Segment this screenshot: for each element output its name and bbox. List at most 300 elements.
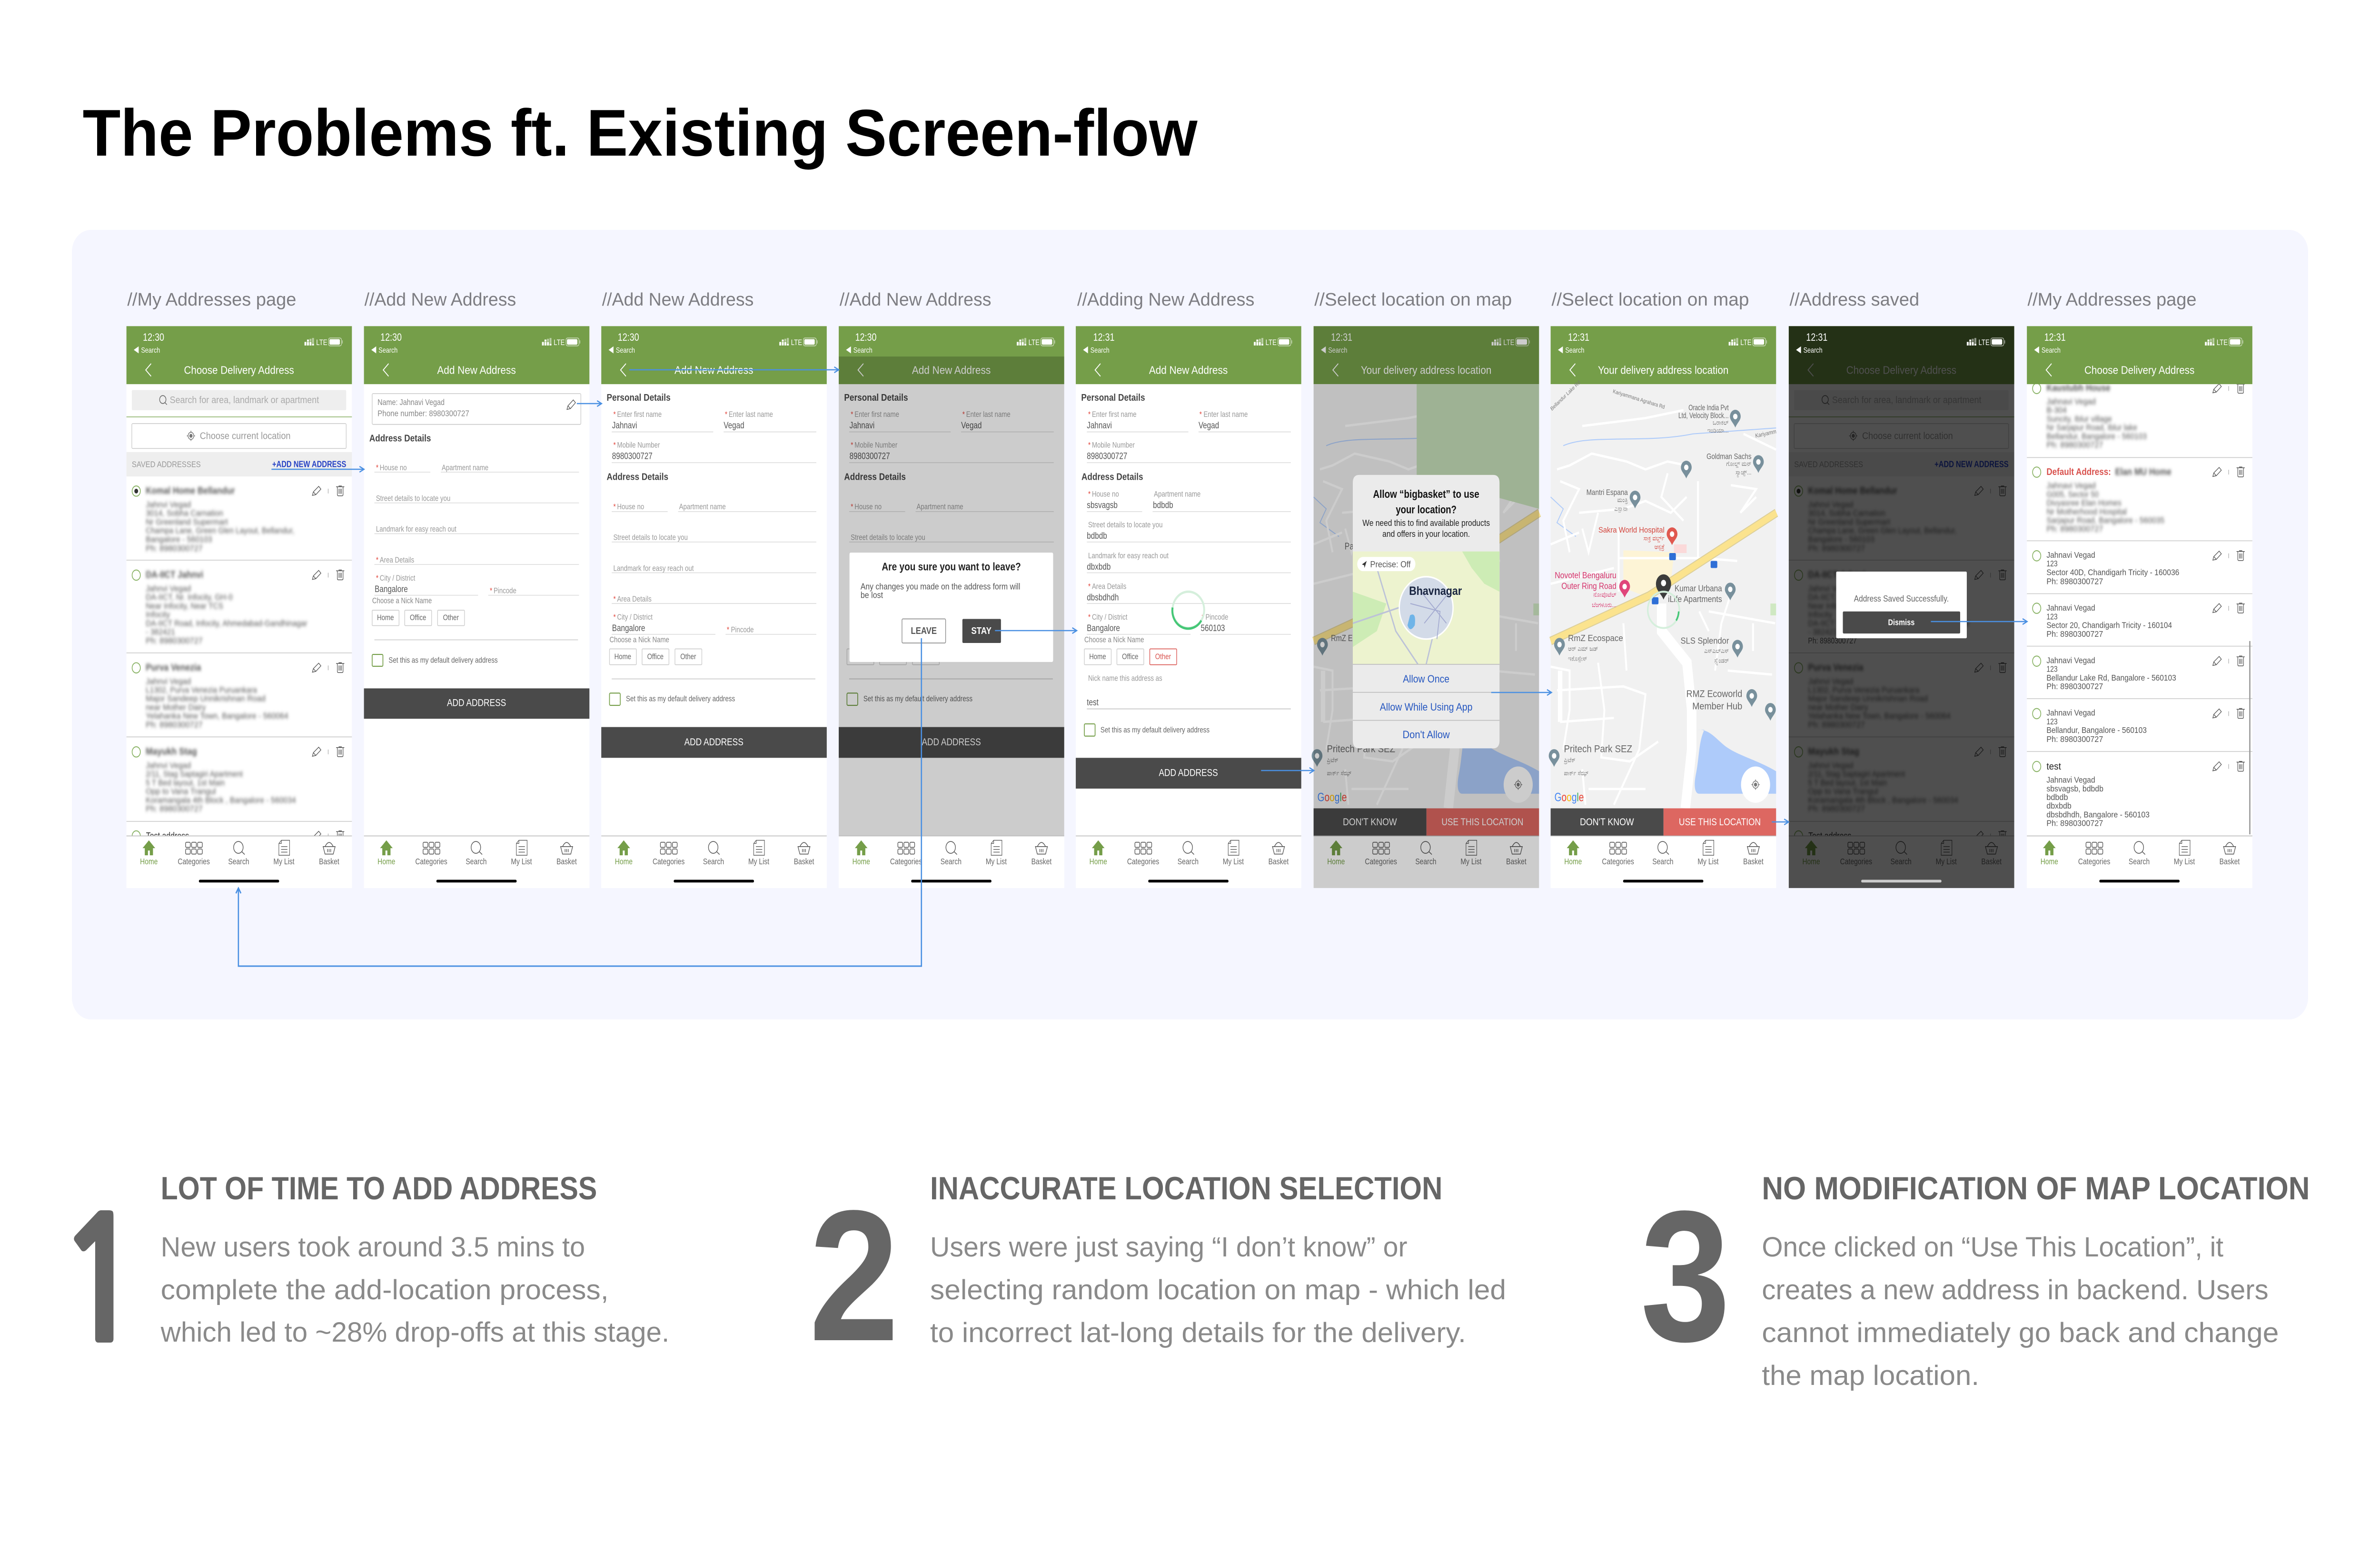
screen 5: adding new address filled form: Jahnavi (1087, 420, 1112, 430)
screen 8: address saved dialog: Basket (1981, 858, 2002, 867)
screen 7: select location on map: LTE (1740, 338, 1752, 347)
screen 6: location permission dialog over map: Categories (1365, 858, 1397, 867)
screen 4: leave confirmation dialog: Enter first name (854, 410, 899, 419)
screen 1: my addresses page: 12:30 (143, 332, 164, 343)
screen 7: select location on map: ಪಾರ್ಕ್ ಸೆಝ್ (1564, 769, 1589, 777)
screen 2: add new address: Add New Address (437, 365, 516, 376)
screen 2: add new address: * (376, 464, 378, 472)
screen 8: address saved dialog: 5 T Bed layout, 1st Main (1808, 779, 1887, 788)
screen 6: location permission dialog over map: LTE (1503, 338, 1515, 347)
screen 5: adding new address filled form: Categories (1127, 858, 1159, 867)
screen 6: location permission dialog over map: Home (1327, 858, 1345, 867)
screen 8: address saved dialog: L1302, Purva Venezia Puruankara (1808, 686, 1919, 695)
screen 5: adding new address filled form: * (1088, 613, 1091, 622)
screen 8: address saved dialog: Choose Delivery Address (1846, 365, 1956, 376)
screen 5: adding new address filled form: bdbdb (1153, 500, 1173, 510)
screen 4: leave confirmation dialog: * (851, 503, 853, 511)
screen 2: add new address: City / District (380, 574, 416, 583)
flow arrows connecting screens (236, 367, 2027, 966)
screen 9: my addresses page with new address (2027, 326, 2252, 888)
screen 9: my addresses page with new address: bdbdb (2046, 793, 2068, 802)
screen 8: address saved dialog: DA-IICT Jahnvi (1808, 570, 1865, 580)
screen 7: select location on map: Oracle India Pvt (1688, 404, 1729, 412)
screen 9: my addresses page with new address: Jahnavi Vegad (2046, 397, 2096, 406)
screen 2: add new address: Basket (556, 858, 577, 867)
screen 4: leave confirmation dialog: Categories (890, 858, 922, 867)
screen 8: address saved dialog: 2/11, Stag Saptagiri Apartment (1808, 770, 1905, 779)
screen 8: address saved dialog: Mayukh Stag (1808, 746, 1859, 757)
screen captions: //Add New Address (602, 289, 754, 310)
screen 7: select location on map: Kumar Urbana (1675, 583, 1722, 593)
screen 7: select location on map: ಆರ್ ಎಮ್ ಜಡ್ (1568, 644, 1598, 652)
screen 3: add new address with personal details: * (613, 410, 616, 419)
screen 5: adding new address filled form: Enter last name (1203, 410, 1248, 419)
screen 8: address saved dialog: Koramangala 4th Block , Bangalore - 560034 (1808, 796, 1958, 805)
screen 9: my addresses page with new address: ◀ Search (2034, 346, 2061, 355)
screen 7: select location on map: Basket (1743, 858, 1764, 867)
screen 6: location permission dialog over map: Google (1318, 791, 1347, 804)
screen captions: //Adding New Address (1077, 289, 1254, 310)
screen 1: my addresses page: ◀ Search (133, 346, 160, 355)
screen 9: my addresses page with new address: Ph: 8980300727 (2046, 441, 2103, 450)
screen 1: my addresses page: Nr Greenland Supermart (146, 518, 228, 527)
screen 9: my addresses page with new address: Bellandur, Bangalore - 560103 (2046, 432, 2147, 441)
screen 3: add new address with personal details: Pincode (731, 625, 754, 634)
screen 2: add new address: * (376, 574, 378, 583)
screen 9: my addresses page with new address: Sector 20, Chandigarh Tricity - 160104 (2046, 621, 2172, 630)
screen 8: address saved dialog: +ADD NEW ADDRESS (1934, 459, 2009, 469)
screen 8: address saved dialog: LTE (1978, 338, 1990, 347)
screen 3: add new address with personal details: Add New Address (674, 365, 753, 376)
screen 4: leave confirmation dialog: ◀ Search (846, 346, 873, 355)
body 3: creates a new address in backend. Users (1762, 1275, 2269, 1305)
screen 6: location permission dialog over map: Allow While Using App (1380, 702, 1472, 713)
screen 5: adding new address filled form: House no (1092, 490, 1119, 499)
screen 8: address saved dialog: Infocity (1808, 611, 1833, 620)
screen 9: my addresses page with new address: Jahnavi Vegad (2046, 656, 2095, 665)
screen 1: my addresses page: Opp to Vana Trangul (146, 787, 216, 796)
screen 2: add new address: Area Details (380, 556, 414, 564)
screen 8: address saved dialog: Komal Home Bellandur (1808, 485, 1897, 496)
screen 2: add new address: My List (511, 858, 532, 867)
screen 5: adding new address filled form (1076, 326, 1301, 888)
screen 8: address saved dialog: Jahnvi Vegad (1808, 761, 1853, 770)
screen 9: my addresses page with new address: G005, Sector 50 (2046, 490, 2099, 499)
screen 1: my addresses page: Purva Venezia (146, 662, 201, 672)
screen 3: add new address with personal details: My List (748, 858, 770, 867)
screen 7: select location on map: DON'T KNOW (1580, 816, 1634, 828)
screen 7: select location on map: Kariyammana Agrahara Rd (1612, 388, 1666, 410)
screen 5: adding new address filled form: Street details to locate you (1088, 521, 1162, 530)
screen 2: add new address: ADD ADDRESS (447, 697, 506, 709)
screen 5: adding new address filled form: test (1087, 697, 1099, 707)
screen 4: leave confirmation dialog: Are you sure you want to leave? (882, 561, 1021, 573)
screen 5: adding new address filled form: Choose a Nick Name (1084, 635, 1144, 644)
screen 3: add new address with personal details: Choose a Nick Name (609, 635, 669, 644)
screen captions (127, 289, 2197, 310)
screen 9: my addresses page with new address: Bellandur, Bangalore - 560103 (2046, 726, 2147, 735)
screen 2: add new address: House no (380, 464, 407, 472)
screen 3: add new address with personal details: Address Details (606, 471, 668, 482)
screen 3: add new address with personal details: * (727, 625, 729, 634)
screen 1: my addresses page: Ph: 8980300727 (146, 544, 203, 553)
screen 7: select location on map: Categories (1602, 858, 1634, 867)
screen 1: my addresses page: near Mother Dairy (146, 703, 206, 712)
screen 5: adding new address filled form: Enter first name (1092, 410, 1137, 419)
screen 1: my addresses page: Choose Delivery Address (184, 365, 294, 376)
screen 5: adding new address filled form: Personal Details (1081, 392, 1145, 403)
screen 8: address saved dialog: Ph: 8980300727 (1808, 805, 1865, 813)
screen 2: add new address: Name: Jahnavi Vegad (377, 398, 445, 407)
screen 2: add new address: Bangalore (375, 583, 408, 594)
screen 7: select location on map: Mantri Espana (1587, 488, 1628, 497)
screen 8: address saved dialog: Yelahanka New Town, Bangalore - 560064 (1808, 712, 1951, 721)
screen captions: //Select location on map (1314, 289, 1512, 310)
screen 9: my addresses page with new address: 123 (2046, 665, 2058, 674)
screen 3: add new address with personal details: Landmark for easy reach out (613, 564, 694, 573)
screen 8: address saved dialog: DA-IICT Road, Infocity, Ahmedabad-Gandhinagar (1808, 619, 1970, 628)
screen 8: address saved dialog: Ph: 8980300727 (1808, 637, 1857, 645)
screen 7: select location on map: ಪ್ರಿಟೆಕ್ (1564, 756, 1576, 764)
screen 4: leave confirmation dialog: House no (854, 503, 882, 511)
screen 8: address saved dialog: Test address (1808, 830, 1851, 841)
heading 3: NO MODIFICATION OF MAP LOCATION (1762, 1170, 2310, 1206)
screen 3: add new address with personal details: Area Details (617, 595, 652, 603)
screen 1: my addresses page: DA-IICT Road, Infocity, Ahmedabad-Gandhinagar (146, 619, 307, 628)
screen 6: location permission dialog over map: Allow Once (1403, 673, 1449, 685)
screen 4: leave confirmation dialog: Add New Address (912, 365, 991, 376)
problem 3 (1640, 1170, 2310, 1391)
screen 7: select location on map: iLife Apartments (1668, 594, 1722, 604)
screen 3: add new address with personal details: House no (617, 503, 644, 511)
screen 8: address saved dialog: Purva Venezia (1808, 662, 1864, 672)
screen 4: leave confirmation dialog: Street details to locate you (851, 533, 925, 542)
panel: screen-flow background (72, 230, 2308, 1019)
screen 9: my addresses page with new address: B-304 (2046, 406, 2067, 415)
screen 7: select location on map: ಒರಾಕಲ್ (1713, 418, 1729, 426)
screen 8: address saved dialog: Jahnvi Vegad (1808, 677, 1853, 686)
screen 5: adding new address filled form: dbsbdhdh (1087, 592, 1119, 603)
body 3 (1762, 1232, 2279, 1391)
screen 7: select location on map: ಆಸ್ಪತ್ರೆ (1655, 543, 1665, 551)
screen 6: location permission dialog over map: Pritech Park SEZ (1327, 743, 1395, 755)
screen 9: my addresses page with new address: Jahnavi Vegad (2046, 551, 2095, 560)
screen 5: adding new address filled form: Set this as my default delivery address (1101, 726, 1210, 735)
screen 3: add new address with personal details: LTE (791, 338, 802, 347)
screen 8: address saved dialog: Near Infocity, Near TCS (1808, 602, 1885, 611)
screen 6: location permission dialog over map: USE THIS LOCATION (1441, 816, 1523, 828)
screen 5: adding new address filled form: Nick name this address as (1088, 674, 1162, 683)
screen 4: leave confirmation dialog: ADD ADDRESS (922, 736, 981, 748)
screen 5: adding new address filled form: Home (1089, 652, 1106, 661)
screen 9: my addresses page with new address: dbsbdhdh, Bangalore - 560103 (2046, 811, 2150, 820)
screen 3: add new address with personal details: Personal Details (606, 392, 671, 403)
screen 2: add new address: LTE (554, 338, 565, 347)
screen 7: select location on map: ಇಕೊಸ್ಪೇಸ್ (1568, 654, 1587, 663)
number 1: 1 (56, 1197, 146, 1366)
screen 9: my addresses page with new address: 12:31 (2044, 332, 2066, 343)
body 1 (160, 1232, 669, 1348)
screen 5: adding new address filled form: ◀ Search (1083, 346, 1110, 355)
body 1: New users took around 3.5 mins to (161, 1232, 585, 1263)
screen 3: add new address with personal details: Basket (794, 858, 814, 867)
screen 9: my addresses page with new address: Basket (2220, 858, 2240, 867)
screen 8: address saved dialog: Opp to Vana Trangul (1808, 787, 1878, 796)
screen 6: location permission dialog over map: Your delivery address location (1361, 365, 1491, 376)
screen 5: adding new address filled form: 12:31 (1093, 332, 1114, 343)
screen 3: add new address with personal details: Home (615, 652, 631, 661)
screen 5: adding new address filled form: Area Details (1092, 582, 1126, 591)
screen 9: my addresses page with new address: dbxbdb (2046, 802, 2072, 811)
screen 7: select location on map: Ltd, Velocity Block... (1678, 411, 1729, 420)
screen 2: add new address: Phone number: 8980300727 (377, 409, 469, 418)
screen 3: add new address with personal details: Enter first name (617, 410, 662, 419)
screen 6: location permission dialog over map: Don't Allow (1403, 729, 1450, 741)
screen 2: add new address: Home (377, 858, 396, 867)
screen 7: select location on map: ಸ್ಪ್ಲೆಂಡರ್ (1714, 656, 1729, 665)
screen 2: add new address: 12:30 (380, 332, 402, 343)
screen 5: adding new address filled form: 8980300727 (1087, 451, 1127, 461)
screen 2: add new address (364, 326, 589, 888)
screen 3: add new address with personal details: Apartment name (679, 503, 726, 511)
screen 1: my addresses page: Test address (146, 830, 189, 841)
screen 6: location permission dialog over map: ಪ್ರಿಟೆಕ್ (1327, 756, 1339, 764)
screen 3: add new address with personal details: * (613, 441, 616, 450)
screen 5: adding new address filled form: Search (1178, 858, 1199, 867)
screen 3: add new address with personal details: ADD ADDRESS (684, 736, 744, 748)
screen 6: location permission dialog over map: RmZ E (1331, 633, 1353, 643)
screen 1: my addresses page: LTE (316, 338, 327, 347)
screen 5: adding new address filled form: ADD ADDRESS (1159, 767, 1218, 779)
screen 4: leave confirmation dialog: STAY (971, 625, 992, 636)
screen 2: add new address: Categories (415, 858, 447, 867)
screen 3: add new address with personal details: Street details to locate you (613, 533, 688, 542)
screen 7: select location on map: USE THIS LOCATION (1679, 816, 1761, 828)
screen 7: select location on map: ಗೋಲ್ಡ್ ಮನ್ (1726, 460, 1751, 468)
screen 8: address saved dialog: Home (1802, 858, 1820, 867)
screen 3: add new address with personal details (601, 326, 827, 888)
screen 9: my addresses page with new address: Divyasree Elan Homes (2046, 499, 2122, 508)
screen 5: adding new address filled form: Pincode (1205, 613, 1228, 622)
screen 4: leave confirmation dialog: 12:30 (855, 332, 876, 343)
screen 3: add new address with personal details: ◀ Search (608, 346, 635, 355)
screen 1: my addresses page: Jahnvi Vegad (146, 500, 191, 509)
screen 9: my addresses page with new address: Ph: 8980300727 (2046, 819, 2103, 828)
screen captions: //Add New Address (365, 289, 516, 310)
screen 7: select location on map: ◀ Search (1557, 346, 1584, 355)
screen 4: leave confirmation dialog: Mobile Number (854, 441, 897, 450)
screen 7: select location on map: Outer Ring Road (1561, 581, 1616, 591)
screen 7: select location on map: Bellandur Lake Rd (1549, 379, 1581, 412)
screen 9: my addresses page with new address: 123 (2046, 717, 2058, 726)
screen 3: add new address with personal details: Vegad (724, 420, 744, 430)
screen 5: adding new address filled form: Apartment name (1154, 490, 1200, 499)
screen 1: my addresses page: Categories (178, 858, 210, 867)
number 2: 2 (809, 1171, 899, 1380)
screen 4: leave confirmation dialog: Enter last name (966, 410, 1011, 419)
screen 7: select location on map: ಮಂತ್ರಿ (1617, 496, 1628, 504)
screen 5: adding new address filled form: sbsvagsb (1087, 500, 1118, 510)
screen 7: select location on map: Goldman Sachs (1706, 452, 1751, 461)
screen 9: my addresses page with new address: Suncity, Iblur village (2046, 415, 2112, 424)
body 3: Once clicked on “Use This Location”, it (1762, 1232, 2223, 1263)
screen captions: //My Addresses page (127, 289, 296, 310)
screen 1: my addresses page (127, 326, 352, 888)
screen 1: my addresses page: Koramangala 4th Block , Bangalore - 560034 (146, 796, 296, 805)
screen 9: my addresses page with new address: LTE (2217, 338, 2228, 347)
screen 4: leave confirmation dialog: Jahnavi (850, 420, 874, 430)
screen 1: my addresses page: DA-IICT, Nr. Infocity, GH-0 (146, 593, 233, 602)
screen 5: adding new address filled form: Bangalore (1087, 623, 1120, 633)
screen 1: my addresses page: Basket (319, 858, 339, 867)
screen 5: adding new address filled form: Home (1090, 858, 1107, 867)
screen 1: my addresses page: Major Sandeep Unnikrishnan Road (146, 694, 266, 703)
screen 1: my addresses page: Bangalore - 560103 (146, 535, 212, 544)
screen 3: add new address with personal details: * (613, 503, 616, 511)
screen 2: add new address: Apartment name (442, 464, 488, 472)
screen 3: add new address with personal details: Other (680, 652, 696, 661)
screen 1: my addresses page: Search for area, landmark or apartment (170, 394, 319, 405)
screen 8: address saved dialog: DA-IICT, Nr. Infocity, GH-0 (1808, 593, 1895, 602)
screen 4: leave confirmation dialog: LTE (1029, 338, 1040, 347)
screen captions: //My Addresses page (2028, 289, 2197, 310)
screen 6: location permission dialog over map: Pa (1345, 541, 1354, 552)
screen 5: adding new address filled form: Basket (1269, 858, 1289, 867)
screen 4: leave confirmation dialog: Search (941, 858, 962, 867)
screen 8: address saved dialog (1789, 326, 2014, 888)
screen 3: add new address with personal details: Jahnavi (612, 420, 637, 430)
screen 7: select location on map: ಇಂಡಿಯಾ... (1707, 426, 1729, 434)
title: The Problems ft. Existing Screen-flow (83, 96, 1198, 170)
screen 4: leave confirmation dialog: Address Details (844, 471, 906, 482)
problem 1 (56, 1170, 669, 1366)
screen 1: my addresses page: Jahnvi Vegad (146, 677, 191, 686)
screen 3: add new address with personal details: Mobile Number (617, 441, 660, 450)
screen 9: my addresses page with new address: Choose Delivery Address (2084, 365, 2194, 376)
screen 9: my addresses page with new address: Ph: 8980300727 (2046, 682, 2103, 691)
screen 8: address saved dialog: SAVED ADDRESSES (1794, 460, 1863, 469)
screen 1: my addresses page: Home (140, 858, 158, 867)
screen 1: my addresses page: Jahnvi Vegad (146, 761, 191, 770)
screen 8: address saved dialog: My List (1936, 858, 1957, 867)
screen 8: address saved dialog: 12:31 (1806, 332, 1827, 343)
screen 4: leave confirmation dialog: be lost (861, 590, 883, 600)
screen 3: add new address with personal details: Bangalore (612, 623, 645, 633)
screen 6: location permission dialog over map: and offers in your location. (1382, 529, 1470, 539)
screen 7: select location on map: Home (1564, 858, 1582, 867)
screen 1: my addresses page: 2/11, Stag Saptagiri Apartment (146, 770, 243, 779)
screen 3: add new address with personal details: Home (615, 858, 633, 867)
screen 9: my addresses page with new address: Jahnavi Vegad (2046, 482, 2096, 490)
screen 1: my addresses page: - 382421 (146, 628, 175, 637)
screen 2: add new address: Other (443, 613, 459, 622)
screen 2: add new address: * (490, 586, 492, 595)
screen 9: my addresses page with new address: Bellandur Lake Rd, Bangalore - 560103 (2046, 673, 2176, 682)
screen 4: leave confirmation dialog (839, 326, 1064, 888)
number 3: 3 (1640, 1172, 1730, 1380)
screen 2: add new address: Set this as my default delivery address (388, 656, 498, 665)
screen 5: adding new address filled form: Mobile Number (1092, 441, 1135, 450)
screen 7: select location on map: My List (1697, 858, 1719, 867)
screen 5: adding new address filled form: Other (1155, 652, 1171, 661)
screen captions: //Add New Address (840, 289, 991, 310)
screen 1: my addresses page: Ph: 8980300727 (146, 637, 203, 645)
screen 4: leave confirmation dialog: Personal Details (844, 392, 908, 403)
screen 8: address saved dialog: Search for area, landmark or apartment (1832, 394, 1982, 405)
screen 1: my addresses page: DA-IICT Jahnvi (146, 570, 203, 580)
screen 1: my addresses page: SAVED ADDRESSES (132, 460, 201, 469)
screen 5: adding new address filled form: Vegad (1199, 420, 1219, 430)
screen 3: add new address with personal details: 12:30 (618, 332, 639, 343)
screen 3: add new address with personal details: Categories (653, 858, 685, 867)
screen 4: leave confirmation dialog: Any changes you made on the address form will (861, 582, 1020, 592)
screen 5: adding new address filled form: City / District (1092, 613, 1128, 622)
screen 8: address saved dialog: Nr Greenland Supermart (1808, 518, 1891, 527)
screen 5: adding new address filled form: * (1088, 410, 1091, 419)
screen 2: add new address: Home (377, 613, 394, 622)
screen 3: add new address with personal details: Search (703, 858, 724, 867)
screen 4: leave confirmation dialog: * (851, 410, 853, 419)
screen 9: my addresses page with new address: Ph: 8980300727 (2046, 630, 2103, 639)
screen 7: select location on map: Novotel Bengaluru (1555, 571, 1616, 580)
screen 1: my addresses page: +ADD NEW ADDRESS (272, 459, 346, 469)
screen 2: add new address: * (376, 556, 378, 564)
screen 5: adding new address filled form: * (1200, 410, 1202, 419)
screen 6: location permission dialog over map: Bhavnagar (1409, 584, 1462, 597)
screen 6: location permission dialog over map: Allow “bigbasket” to use (1373, 488, 1479, 500)
screen 8: address saved dialog: near Mother Dairy (1808, 703, 1868, 712)
screen 2: add new address: Landmark for easy reach out (376, 525, 457, 534)
screen 7: select location on map: ಸ್ಯಾಚ್ಸ್... (1735, 468, 1751, 477)
screen 7: select location on map: ಎಸ್ಎಲ್ಎಸ್ (1704, 647, 1729, 654)
screen 4: leave confirmation dialog: Apartment name (916, 503, 963, 511)
screen 7: select location on map: ಬೆಂಗಳೂರು... (1592, 601, 1616, 609)
screen 6: location permission dialog over map: My List (1460, 858, 1482, 867)
screen 7: select location on map: ಎಸ್ಪಾನಾ (1614, 504, 1628, 513)
screen 9: my addresses page with new address: Kaustubh House (2046, 383, 2111, 393)
screen 4: leave confirmation dialog: LEAVE (911, 625, 937, 636)
screen 9: my addresses page with new address: Sarjapur Road, Bangalore - 560035 (2046, 516, 2164, 525)
screen 8: address saved dialog: Ph: 8980300727 (1808, 544, 1865, 553)
screen 8: address saved dialog: 3014, Sobha Carnation (1808, 509, 1885, 518)
screen 8: address saved dialog: Dismiss (1888, 618, 1915, 627)
screen 6: location permission dialog over map: ಪಾರ್ಕ್ ಸೆಝ್ (1327, 769, 1352, 777)
screen 8: address saved dialog: Bangalore - 560103 (1808, 535, 1874, 544)
screen 1: my addresses page: Ph: 8980300727 (146, 721, 203, 730)
screen 8: address saved dialog: ◀ Search (1796, 346, 1823, 355)
screen 2: add new address: Office (410, 613, 426, 622)
body 2: to incorrect lat-long details for the delivery. (930, 1317, 1466, 1348)
screen 4: leave confirmation dialog: My List (986, 858, 1007, 867)
screen 6: location permission dialog over map: Precise: Off (1370, 559, 1411, 569)
problem 2 (809, 1170, 1506, 1380)
screen 9: my addresses page with new address: Categories (2078, 858, 2110, 867)
screen 4: leave confirmation dialog: Set this as my default delivery address (863, 694, 972, 703)
screen 1: my addresses page: Choose current location (200, 430, 290, 441)
screen 1: my addresses page: Champa Lane, Green Glen Layout, Bellandur, (146, 526, 294, 535)
screen 5: adding new address filled form: * (1088, 441, 1091, 450)
screen 4: leave confirmation dialog: 8980300727 (850, 451, 890, 461)
screen 5: adding new address filled form: Address Details (1081, 471, 1143, 482)
screen 8: address saved dialog: Champa Lane, Green Glen Layout, Bellandur, (1808, 526, 1957, 535)
screen 5: adding new address filled form: * (1088, 490, 1091, 499)
screen 5: adding new address filled form: Landmark for easy reach out (1088, 551, 1169, 560)
screen 4: leave confirmation dialog: Vegad (961, 420, 982, 430)
body 2: selecting random location on map - which led (930, 1275, 1506, 1305)
screen 9: my addresses page with new address: sbsvagsb, bdbdb (2046, 784, 2103, 793)
screen 3: add new address with personal details: * (725, 410, 727, 419)
screen 3: add new address with personal details: * (613, 595, 616, 603)
